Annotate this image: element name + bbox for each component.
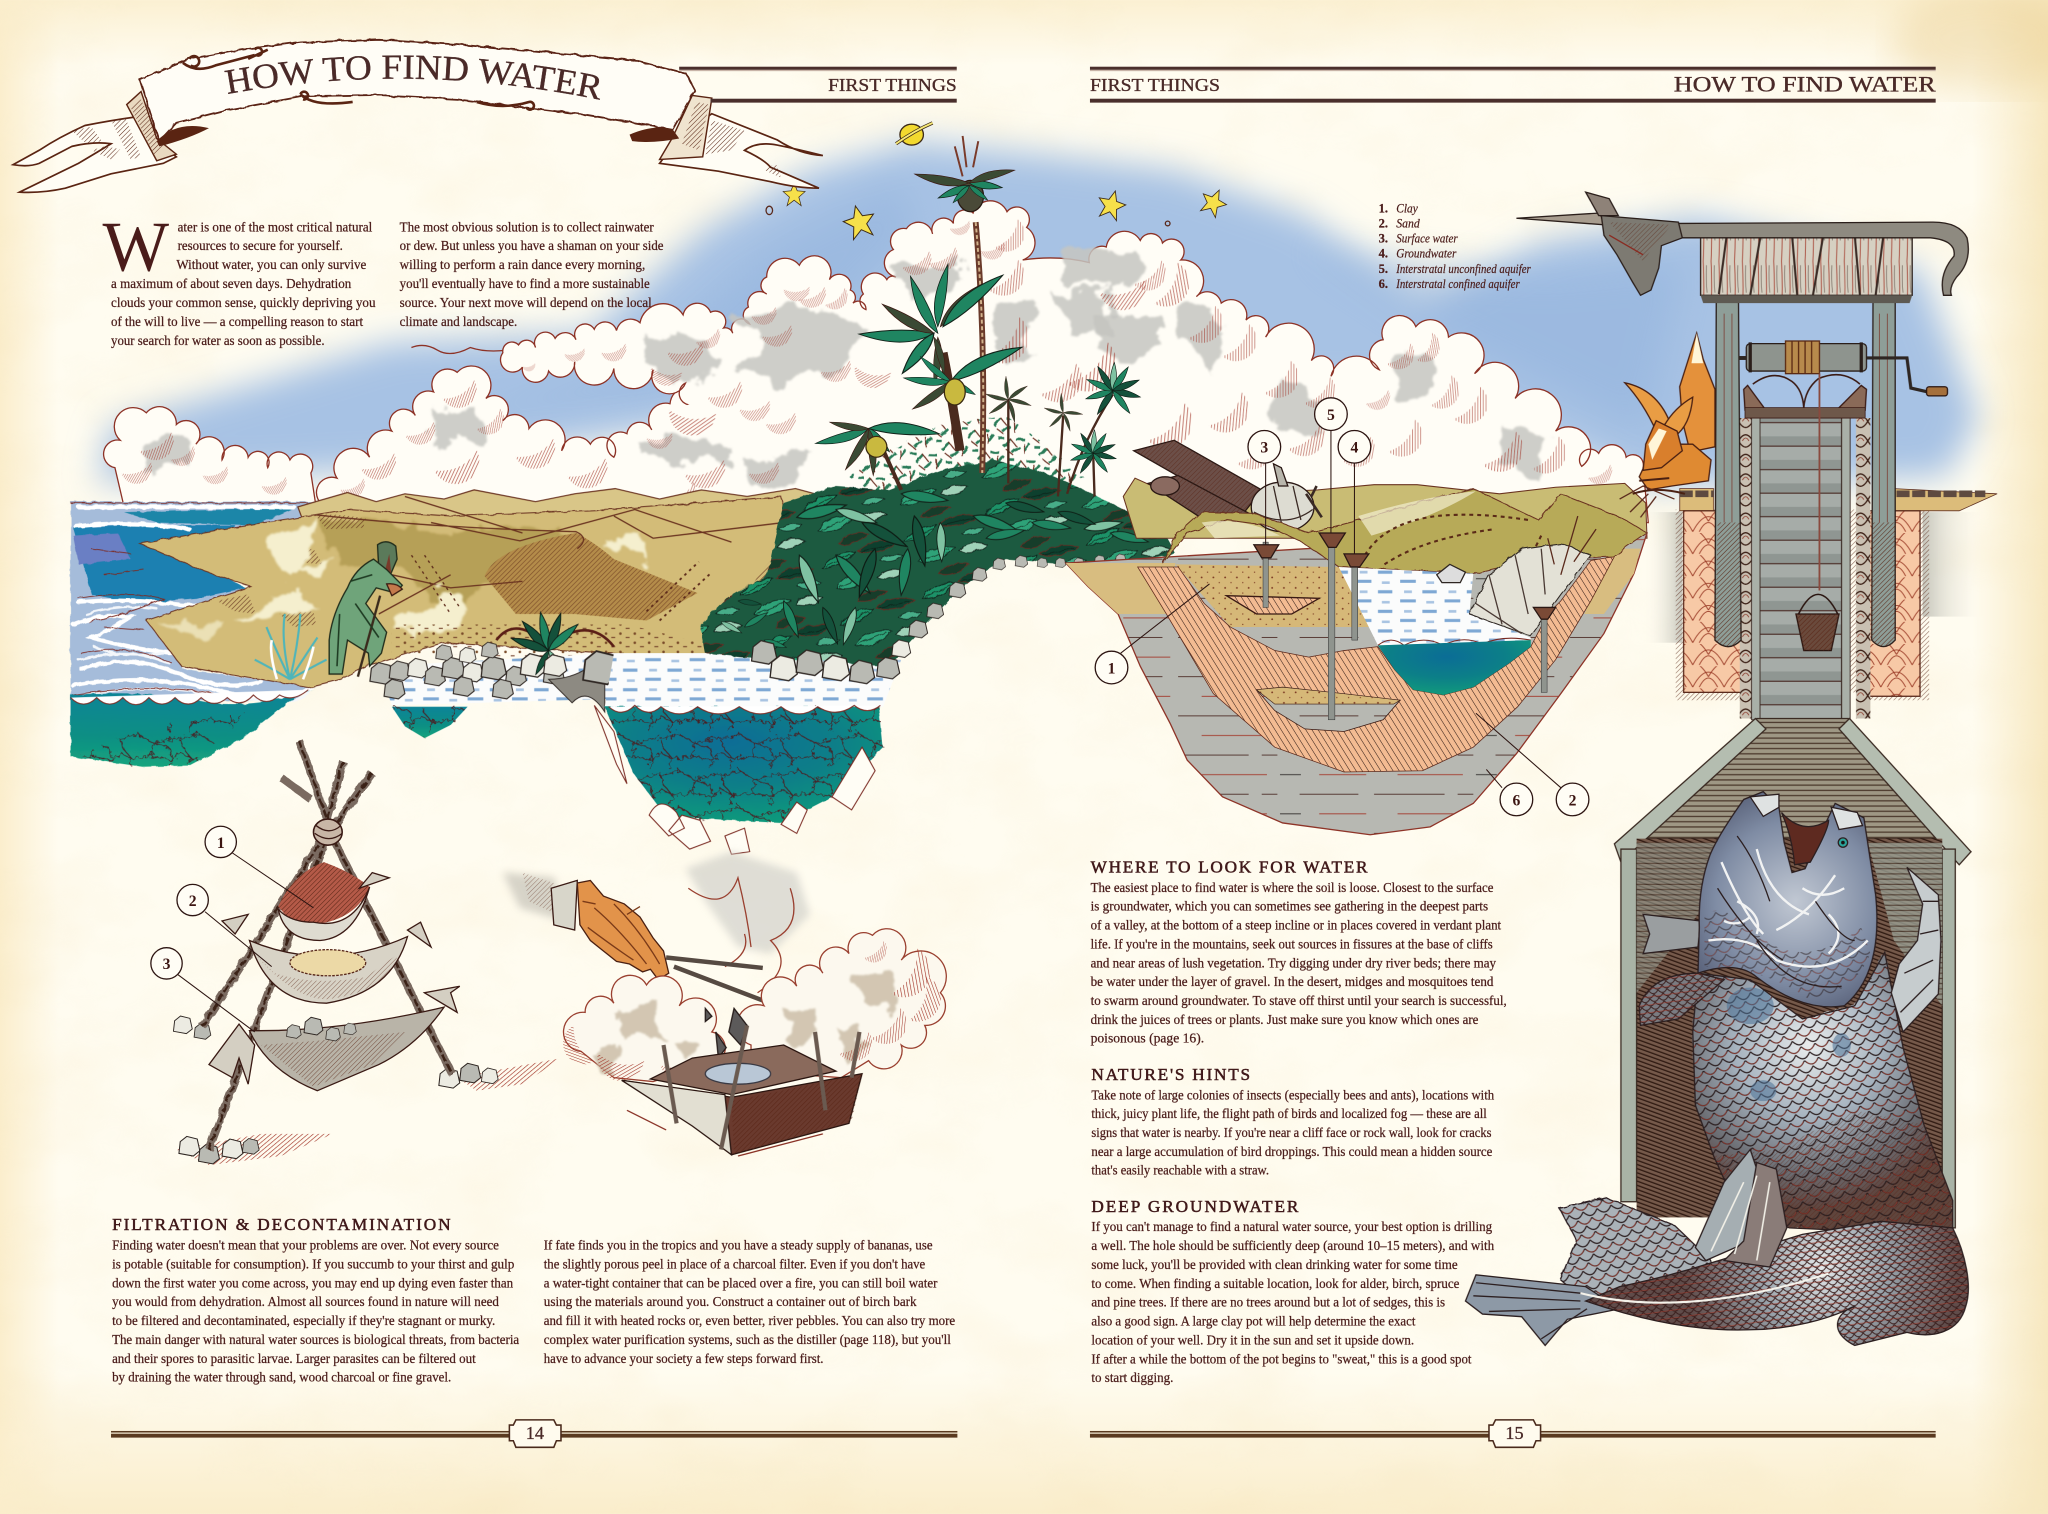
- hill highlights: [1202, 491, 1476, 538]
- nature's hints text: near a large accumulation of bird droppings. This could mean a hidden source: [1091, 1144, 1492, 1160]
- where to look text: [1091, 880, 1507, 1047]
- far left small cloud: [104, 407, 316, 507]
- filtration text column 2: and fill it with heated rocks or, even better, river pebbles. You can also try more: [544, 1313, 955, 1329]
- scroll curls: [183, 48, 534, 110]
- intro text column 2: you'll eventually have to find a more sustainable: [400, 276, 650, 292]
- nature's hints text: that's easily reachable with a straw.: [1091, 1163, 1269, 1179]
- light dune highlights: [157, 517, 647, 640]
- legend list: Sand: [1396, 216, 1420, 230]
- filtration text column 2: complex water purification systems, such as the distiller (page 118), but you'll: [544, 1332, 951, 1348]
- hatch fringe around lining: [1676, 509, 1929, 700]
- callout 2: 2: [1569, 792, 1577, 809]
- teal groundwater pool: [1378, 640, 1531, 695]
- nature's hints text: [1091, 1087, 1494, 1179]
- rocky ledge: [370, 642, 564, 699]
- stones layer cloth: [249, 1007, 444, 1091]
- fish main body: [1693, 952, 1953, 1236]
- deep groundwater text: If after a while the bottom of the pot begins to "sweat," this is a good spot: [1091, 1351, 1472, 1367]
- hare ear left: [1625, 383, 1669, 431]
- sparse scrub behind palms: [849, 415, 1084, 503]
- under fold curls: [157, 126, 679, 146]
- large leaves: [780, 488, 1149, 646]
- giant fish: [1465, 792, 1968, 1345]
- tan sand wedges: [1066, 563, 1176, 614]
- grey wash shading beside lining: [1643, 512, 1682, 643]
- callout 5: 5: [1327, 407, 1335, 424]
- filtration text column 2: a water-tight container that can be placed over a fire, you can still boil water: [544, 1275, 938, 1291]
- deep groundwater text: a well. The hole should be sufficiently deep (around 10–15 meters), and with: [1091, 1238, 1494, 1254]
- where to look text: to swarm around groundwater. To stave off thirst until your search is successful,: [1091, 993, 1507, 1009]
- heading: where to look for water: WHERE TO LOOK FOR WATER: [1091, 858, 1368, 877]
- sleeve: [503, 873, 577, 930]
- dune ridge lines: [315, 496, 784, 614]
- grey cloud shading washes: [144, 248, 1548, 486]
- legend list: 6.: [1379, 277, 1388, 291]
- intro text column 1: [111, 219, 376, 349]
- well pipes: [1254, 533, 1556, 720]
- sea base: [71, 502, 347, 700]
- rocks beside lake: [1469, 543, 1591, 636]
- shoreline rocks and low water: [370, 642, 614, 738]
- legend list: 3.: [1379, 232, 1388, 246]
- intro text column 1: clouds your common sense, quickly depriving you: [111, 295, 376, 311]
- well structure: [1516, 192, 1997, 1228]
- deep groundwater text: and pine trees. If there are no trees around but a lot of sedges, this is: [1091, 1295, 1445, 1311]
- top palm crown: [914, 136, 1016, 212]
- planet: [896, 123, 933, 145]
- title banner: [10, 38, 824, 194]
- winch drum and crank: [1738, 341, 1947, 396]
- filtration tripod illustration: [151, 741, 562, 1165]
- desert dunes: [140, 489, 849, 687]
- callout 1: 1: [1108, 660, 1116, 677]
- deep groundwater text: [1091, 1219, 1494, 1386]
- distant hills: [1123, 478, 1647, 538]
- tall palm tree: [814, 136, 1025, 490]
- right page section label: FIRST THINGS: [1090, 75, 1220, 95]
- intro text column 1: your search for water as soon as possible.: [111, 333, 325, 349]
- crashed biplane: [1134, 440, 1322, 532]
- heading: filtration and decontamination: FILTRATION & DECONTAMINATION: [112, 1215, 451, 1234]
- filter callout 2: [177, 884, 208, 916]
- where to look text: The easiest place to find water is where the soil is loose. Closest to the surface: [1091, 880, 1493, 896]
- fish eye: [1838, 838, 1848, 847]
- callout 1: [1095, 651, 1128, 684]
- title text: HOW TO FIND WATER: [224, 55, 600, 100]
- hatch shading on cloud puffs: [122, 219, 1617, 516]
- footprints on hill: [1365, 515, 1541, 588]
- sand block: [1176, 564, 1374, 627]
- left page header text: FIRST THINGS: [828, 75, 957, 95]
- intro text column 1: resources to secure for yourself.: [178, 238, 343, 254]
- foreground gravel: [392, 624, 744, 660]
- sky watercolor wash: [98, 141, 1979, 486]
- filtration text column 1: Finding water doesn't mean that your problems are over. Not every source: [112, 1237, 499, 1253]
- roof planks: [1701, 235, 1912, 303]
- filtration text column 1: you would from dehydration. Almost all sources found in nature will need: [112, 1294, 499, 1310]
- shaded dune body: [315, 517, 576, 614]
- intro text column 1: Without water, you can only survive: [176, 257, 366, 273]
- upper tail piece: [1560, 1198, 1724, 1301]
- ground strip: [1680, 489, 1997, 511]
- jungle foliage: [700, 415, 1176, 684]
- deep groundwater text: some luck, you'll be provided with clean drinking water for some time: [1091, 1257, 1458, 1273]
- stars: [766, 183, 1231, 241]
- palm with bananas: [903, 343, 1025, 412]
- shaft stairs: [1759, 417, 1842, 720]
- legend list: Clay: [1396, 201, 1418, 215]
- surf and foam lines: [71, 503, 313, 701]
- far teal strip: [124, 508, 294, 525]
- nature's hints text: Take note of large colonies of insects (especially bees and ants), locations with: [1091, 1087, 1494, 1103]
- back dunes: [298, 489, 849, 549]
- deep groundwater text: to come. When finding a suitable location, look for alder, birch, spruce: [1091, 1276, 1459, 1292]
- where to look text: and near areas of lush vegetation. Try digging under dry river beds; there may: [1091, 955, 1496, 971]
- cloud trail tail: [411, 345, 507, 354]
- right page footer rule and page number: 15: [1505, 1423, 1524, 1443]
- big palm crown: [859, 263, 1008, 451]
- head plates: [1708, 849, 1868, 967]
- deep groundwater text: location of your well. Dry it in the sun and set it upside down.: [1091, 1333, 1414, 1349]
- white rocks hanging under pool: [594, 705, 875, 854]
- left banana palm: [814, 417, 940, 490]
- right ribbon fold: [660, 95, 712, 159]
- filtration text column 1: to be filtered and decontaminated, especially if they're stagnant or murky.: [112, 1313, 495, 1329]
- hot stones boiling illustration: [503, 852, 948, 1156]
- filtration text column 1: [112, 1237, 520, 1385]
- callout 3: [1248, 430, 1281, 463]
- rope knot: [313, 819, 342, 845]
- callout 3: 3: [1260, 440, 1268, 457]
- blue scale blotches: [1727, 988, 1851, 1101]
- where to look text: is groundwater, which you can sometimes see gathering in the deepest parts: [1091, 899, 1488, 915]
- drop cap W: W: [103, 208, 170, 286]
- teal underground pool: [605, 707, 883, 823]
- filtration text column 1: down the first water you come across, you may end up dying even faster than: [112, 1275, 513, 1291]
- upper grey lens: [1230, 627, 1378, 657]
- filter callout 3: 3: [163, 956, 171, 973]
- filter callout 1: 1: [217, 835, 225, 852]
- filtration text column 1: is potable (suitable for consumption). If you succumb to your thirst and gulp: [112, 1256, 514, 1272]
- tripod sticks: [202, 741, 452, 1149]
- white gap at base of lining center: [1750, 692, 1857, 705]
- intro text column 2: climate and landscape.: [400, 314, 517, 330]
- intro text column 2: or dew. But unless you have a shaman on your side: [400, 238, 664, 254]
- dune sand base: [140, 496, 793, 687]
- right page footer rule and page number: [1090, 1420, 1936, 1447]
- legend list: Interstratal unconfined aquifer: [1395, 262, 1531, 276]
- foliage mass: [700, 460, 1176, 666]
- hare head: [1643, 421, 1682, 470]
- right dorsal fin: [1891, 867, 1941, 1032]
- where to look text: be water under the layer of gravel. In the desert, midges and mosquitoes tend: [1091, 974, 1493, 990]
- filtration text column 2: using the materials around you. Construct a container out of birch bark: [544, 1294, 918, 1310]
- lower tail band: [1586, 1221, 1968, 1345]
- callout 5: [1315, 398, 1347, 430]
- small clay lens: [1226, 596, 1319, 614]
- legend list: 2.: [1379, 216, 1388, 230]
- legend list: [1379, 201, 1531, 291]
- intro text column 2: The most obvious solution is to collect rainwater: [400, 219, 654, 235]
- where to look text: poisonous (page 16).: [1091, 1031, 1204, 1047]
- heading: deep groundwater: DEEP GROUNDWATER: [1091, 1197, 1299, 1216]
- tail fin spines left: [1465, 1275, 1620, 1345]
- low cloud bank: [316, 366, 731, 517]
- pelvic fins: [1695, 1149, 1770, 1261]
- deep groundwater text: to start digging.: [1091, 1370, 1173, 1386]
- right smoke cloud: [737, 929, 948, 1078]
- intro text column 2: willing to perform a rain dance every morning,: [400, 257, 645, 273]
- cloud bank: [104, 201, 1648, 523]
- heading: nature's hints: NATURE'S HINTS: [1091, 1065, 1250, 1084]
- intro text column 2: [400, 219, 664, 330]
- main scroll: [140, 39, 695, 141]
- left page footer rule and page number: [111, 1420, 957, 1447]
- head scale texture: [1704, 911, 1870, 999]
- deep teal water below: [71, 690, 313, 767]
- aquifer cross-section: [1066, 398, 1647, 835]
- dark lower body hatch: [1714, 1110, 1953, 1236]
- small bushes to the left: [720, 598, 787, 650]
- sand layer cloth: [249, 937, 408, 1003]
- right brick lining: [1866, 511, 1920, 696]
- filtration text column 1: by draining the water through sand, wood charcoal or fine gravel.: [112, 1369, 451, 1385]
- legend list: Surface water: [1396, 232, 1458, 246]
- shaft top bar and arches: [1744, 385, 1866, 410]
- callout 4: 4: [1351, 440, 1359, 457]
- left smoke cloud: [555, 975, 725, 1084]
- filtration text column 1: The main danger with natural water sources is biological threats, from bacteria: [112, 1332, 520, 1348]
- left ribbon fold: [127, 92, 176, 161]
- leader lines: [1121, 430, 1561, 788]
- fish mouth: [1782, 813, 1829, 865]
- nature's hints text: thick, juicy plant life, the flight path of birds and localized fog — these are all: [1091, 1106, 1487, 1122]
- where to look text: drink the juices of trees or plants. Just make sure you know which ones are: [1091, 1012, 1478, 1028]
- left pectoral fins: [1643, 914, 1701, 954]
- hare tail: [1680, 333, 1715, 452]
- legend list: 4.: [1379, 246, 1388, 260]
- violet water strip: [73, 533, 131, 564]
- cliff rocks edge: [752, 554, 1126, 684]
- water splash: [255, 614, 327, 679]
- callout 6: [1500, 783, 1533, 816]
- legend list: 5.: [1379, 262, 1388, 276]
- ground shadow and stones: [176, 1058, 562, 1165]
- intro text column 1: ater is one of the most critical natural: [178, 219, 372, 235]
- sea, left side: [71, 502, 347, 767]
- orange hare on ledge: [1620, 333, 1715, 517]
- falling stones: [705, 1008, 747, 1058]
- clay band: [1138, 557, 1614, 772]
- left ribbon tail: [13, 116, 176, 192]
- log columns beside shaft: [1740, 418, 1753, 718]
- birch bark box: [622, 1025, 862, 1156]
- small teal pool: [392, 707, 468, 738]
- roots: [1620, 486, 1674, 517]
- deep blue water band: [73, 525, 246, 604]
- unicorn head on beam: [1516, 192, 1682, 295]
- hare ear right: [1664, 397, 1693, 436]
- explorer with walking stick: [329, 542, 402, 677]
- filter callout 1: [205, 826, 236, 858]
- filter callout 3: [151, 948, 182, 979]
- filter callout 2: 2: [189, 893, 197, 910]
- agave plant: [496, 611, 619, 684]
- cover for cloud seam: [682, 392, 747, 517]
- filtration text column 2: [544, 1237, 955, 1367]
- chamber walls and interior: [1621, 839, 1955, 1228]
- legend list: Interstratal confined aquifer: [1395, 277, 1520, 291]
- left page footer rule and page number: 14: [526, 1423, 544, 1443]
- stone arch: [549, 653, 605, 712]
- filter leaders: [178, 853, 313, 1032]
- lower aquifer lens: [1256, 690, 1400, 732]
- left brick lining: [1684, 511, 1741, 692]
- filtration text column 1: and their spores to parasitic larvae. Larger parasites can be filtered out: [112, 1351, 476, 1367]
- where to look text: life. If you're in the mountains, seek out sources in fissures at the base of cliffs: [1091, 936, 1493, 952]
- legend list: 1.: [1379, 201, 1388, 215]
- filtration text column 2: If fate finds you in the tropics and you have a steady supply of bananas, use: [544, 1237, 933, 1253]
- lake surface water: [1339, 567, 1531, 645]
- left page header rule: [679, 67, 957, 103]
- deep groundwater text: If you can't manage to find a natural water source, your best option is drilling: [1091, 1219, 1492, 1235]
- callout 4: [1338, 430, 1371, 463]
- right page title: HOW TO FIND WATER: [1674, 72, 1936, 97]
- small dune top right: [751, 546, 797, 614]
- filtration text column 2: the slightly porous peel in place of a charcoal filter. Even if you don't have: [544, 1256, 925, 1272]
- right ribbon tail: [660, 114, 823, 188]
- nature's hints text: signs that water is nearby. If you're near a cliff face or rock wall, look for cracks: [1091, 1125, 1491, 1141]
- callout 6: 6: [1512, 792, 1520, 809]
- filtration text column 2: have to advance your society a few steps forward first.: [544, 1351, 824, 1367]
- hay layer: [278, 862, 370, 941]
- cloth ties: [209, 873, 460, 1084]
- hare body: [1639, 444, 1711, 490]
- well posts: [1715, 301, 1895, 647]
- steam: [686, 852, 810, 993]
- right foam water and deep pool: [594, 653, 901, 854]
- dune hatch crest: [315, 514, 366, 529]
- callout 2: [1556, 783, 1589, 816]
- small palms: [985, 362, 1141, 496]
- lower chamber roof and neck: [1614, 718, 1971, 865]
- intro text column 1: a maximum of about seven days. Dehydration: [111, 276, 351, 292]
- olive hills: [1162, 489, 1647, 573]
- roof beam with trunk end: [1678, 222, 1968, 295]
- right page header rule: [1090, 67, 1936, 103]
- fish head: [1698, 792, 1877, 1007]
- grey bedrock bowl: [1066, 533, 1647, 835]
- deep groundwater text: also a good sign. A large clay pot will help determine the exact: [1091, 1313, 1416, 1329]
- tongs: [666, 957, 784, 1008]
- intro text column 2: source. Your next move will depend on the local: [400, 295, 652, 311]
- legend list: Groundwater: [1396, 246, 1456, 260]
- where to look text: of a valley, at the bottom of a steep incline or in places covered in verdant plant: [1091, 917, 1501, 933]
- shaft side rails: [1752, 417, 1760, 720]
- bucket on rope: [1796, 374, 1839, 651]
- gloved hand: [577, 880, 669, 980]
- main cloud mass: [501, 201, 1648, 523]
- intro text column 1: of the will to live — a compelling reason to start: [111, 314, 363, 330]
- hatched dune slope: [485, 533, 697, 621]
